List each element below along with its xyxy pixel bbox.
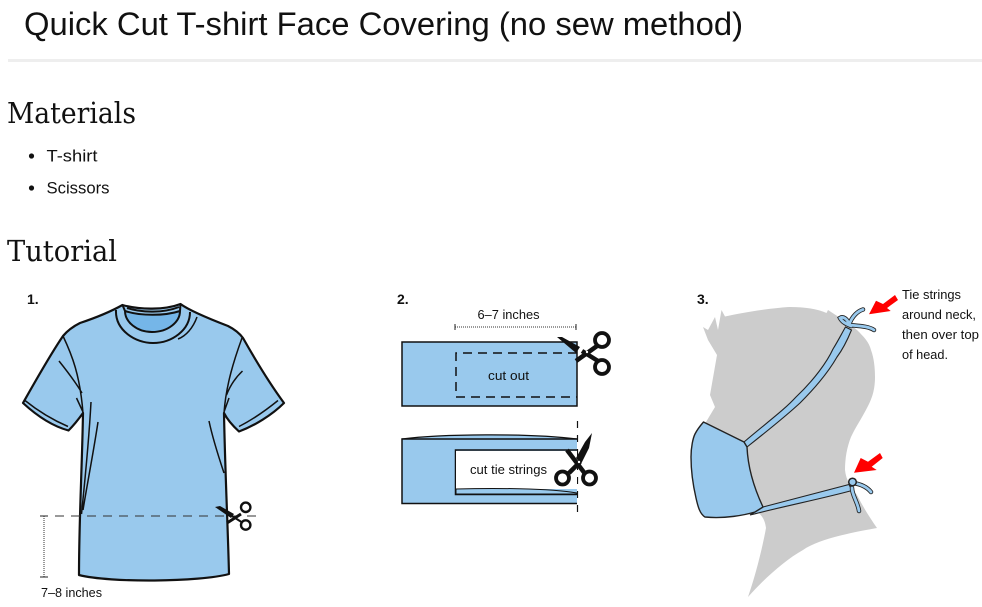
- measure: 7-8 inches: 7–8 inches: [41, 586, 102, 600]
- instruction text: of head.: [902, 348, 948, 362]
- icon: scissors: [215, 503, 250, 530]
- materials list: T-shirt: [46, 146, 98, 166]
- fabric strip bottom with cut-out: [402, 439, 577, 504]
- top tie string: [744, 327, 852, 447]
- t-shirt collar band: [116, 304, 190, 343]
- arrow: top: [869, 295, 898, 314]
- instruction text: then over top: [902, 328, 979, 342]
- step number 2: 2.: [397, 291, 409, 307]
- t-shirt body: [23, 304, 284, 581]
- bottom knot: [849, 478, 871, 511]
- step 1: t-shirt illustration: [23, 291, 284, 600]
- step number 1: 1.: [27, 291, 39, 307]
- instruction text: around neck,: [902, 308, 976, 322]
- measure: 7-8 inches: [40, 516, 102, 600]
- mask: [691, 422, 763, 518]
- arrow: bottom: [854, 453, 883, 473]
- t-shirt inner collar: [125, 311, 180, 332]
- heading: materials: Materials: [7, 96, 136, 130]
- bottom tie string: [750, 484, 852, 515]
- materials list: Scissors: [46, 178, 110, 198]
- label: cut out: cut out: [488, 369, 530, 383]
- label: cut tie strings: cut tie strings: [470, 463, 547, 477]
- measure: 6-7 inches: [455, 308, 576, 330]
- fabric strip top: [402, 342, 577, 406]
- instruction text: Tie strings: [902, 288, 961, 302]
- step 3: head wearing mask: [691, 288, 979, 597]
- title: Quick Cut T-shirt Face Covering (no sew method): [24, 6, 743, 42]
- icon: bottom scissors: [556, 433, 596, 484]
- top knot: [840, 310, 874, 330]
- cut line: [55, 515, 262, 517]
- t-shirt folds: [25, 317, 278, 514]
- instruction text: [902, 288, 979, 362]
- heading: tutorial: Tutorial: [7, 234, 117, 268]
- materials list: [29, 146, 109, 198]
- step 2: fabric cutting: [397, 291, 609, 517]
- icon: top scissors: [557, 333, 609, 374]
- dashed cut-out outline: [456, 353, 577, 397]
- measure: 6-7 inches: 6–7 inches: [478, 308, 540, 322]
- step number 3: 3.: [697, 291, 709, 307]
- vertical dashed guide: [576, 421, 578, 517]
- head silhouette: [703, 307, 877, 597]
